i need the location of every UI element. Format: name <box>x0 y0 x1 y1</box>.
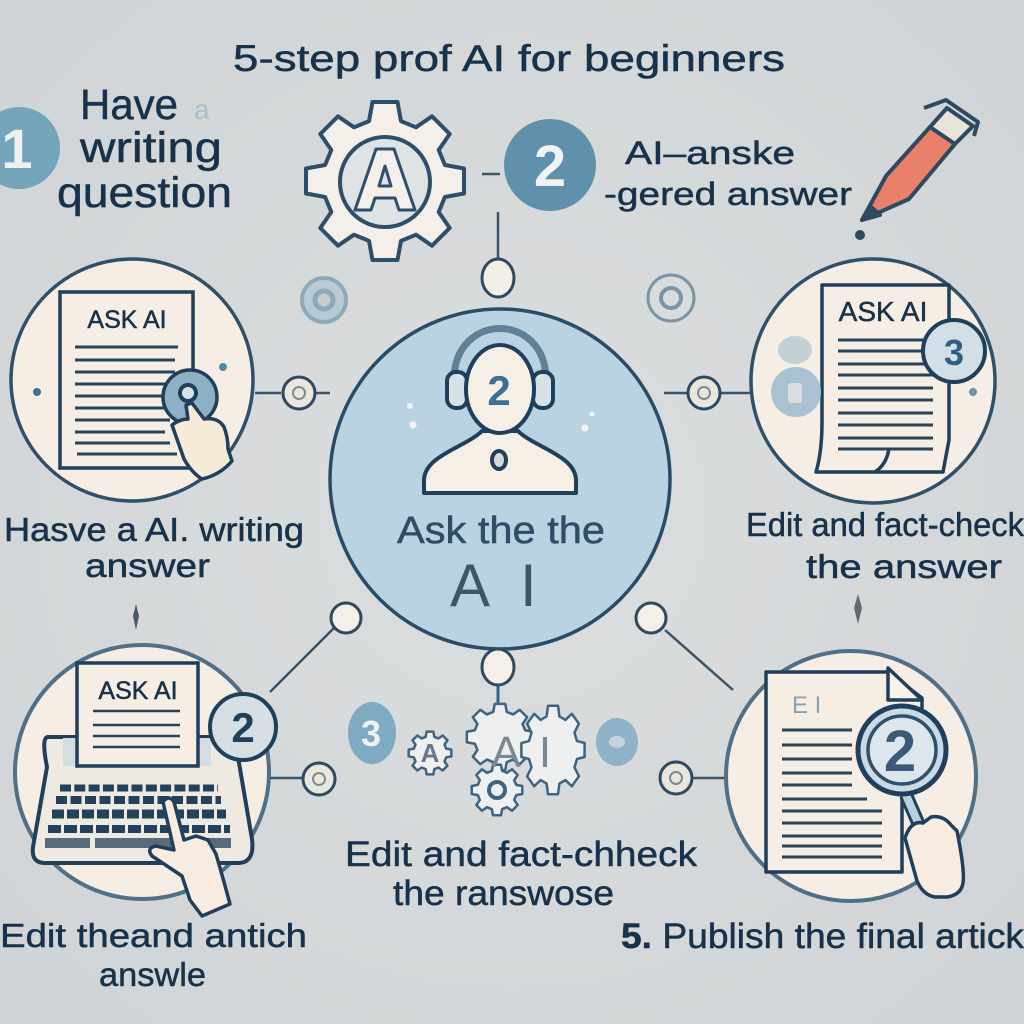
head number: 2 <box>487 367 511 414</box>
central circle <box>330 309 670 649</box>
step 2 text: AI–anske <box>625 135 795 171</box>
step 1 text: writing <box>79 124 222 172</box>
blurred robot icon <box>771 336 821 417</box>
panel: ask AI document right: 3 <box>944 332 964 373</box>
connector node right <box>664 377 750 409</box>
bottom caption: Edit and fact-chheck <box>345 835 698 874</box>
connector bottom <box>482 649 514 705</box>
connector node left <box>255 377 330 409</box>
decorative node left <box>302 278 346 322</box>
step 1 text: Have <box>80 81 178 129</box>
left panel caption: Hasve a AI. writing <box>4 511 304 548</box>
panel: typewriter: ASK AI <box>98 677 178 705</box>
right panel caption <box>746 506 1024 585</box>
connector node lower right <box>660 762 726 794</box>
step 1 text: question <box>57 169 232 217</box>
step 1 badge <box>0 107 60 189</box>
icon group: gears with AI: A <box>421 738 440 768</box>
central label: Ask the the <box>397 510 605 552</box>
connector lower left <box>270 603 361 692</box>
connector lower right <box>636 603 733 690</box>
left panel caption <box>4 511 304 584</box>
bottom caption <box>345 835 698 913</box>
bottom left caption: Edit theand antich <box>0 917 307 954</box>
step 5 caption: 5. Publish the final artick <box>621 917 1024 956</box>
right panel caption: Edit and fact-check <box>746 506 1024 543</box>
panel: ask AI document right: ASK AI <box>839 296 927 327</box>
small arrow left <box>133 604 139 630</box>
right panel caption: the answer <box>806 548 1002 585</box>
panel: typewriter <box>15 645 276 916</box>
step 2 text: -gered answer <box>604 176 852 212</box>
central label <box>397 510 605 619</box>
bottom left caption: answle <box>99 956 206 993</box>
bottom caption: the ranswose <box>393 874 614 913</box>
panel: document with magnifier <box>726 651 976 901</box>
bottom left caption <box>0 917 307 993</box>
step 2 text <box>604 135 852 212</box>
panel: document with magnifier: 2 <box>884 719 916 784</box>
step 2 badge <box>504 119 596 211</box>
step 2 badge: 2 <box>534 134 566 199</box>
left panel caption: answer <box>85 547 210 584</box>
icon: person with headset <box>424 328 576 493</box>
panel: ask AI document left: ASK AI <box>87 306 167 334</box>
step 1 badge: 1 <box>1 117 33 180</box>
connector: top to centre <box>482 212 514 297</box>
central label: AI <box>450 552 537 619</box>
step 1 text <box>57 81 232 217</box>
panel: ask AI document left <box>11 259 253 501</box>
step 1 text: a <box>194 94 210 125</box>
title: 5-step prof AI for beginners <box>233 38 785 79</box>
icon group: gears with AI: 3 <box>361 713 381 754</box>
decorative node right <box>648 275 694 321</box>
icon group: gears with AI <box>348 702 638 815</box>
sparkles <box>407 403 594 432</box>
panel: typewriter: 2 <box>231 704 255 751</box>
panel: ask AI document right <box>751 259 995 503</box>
icon group: gears with AI: AI <box>491 728 551 777</box>
icon: AI gear <box>306 102 464 260</box>
connector node lower left <box>270 763 335 795</box>
connector: gear to step 2 <box>482 173 500 175</box>
panel: document with magnifier: E I <box>792 692 821 719</box>
icon: pen <box>857 100 978 238</box>
small arrow right <box>854 594 862 624</box>
